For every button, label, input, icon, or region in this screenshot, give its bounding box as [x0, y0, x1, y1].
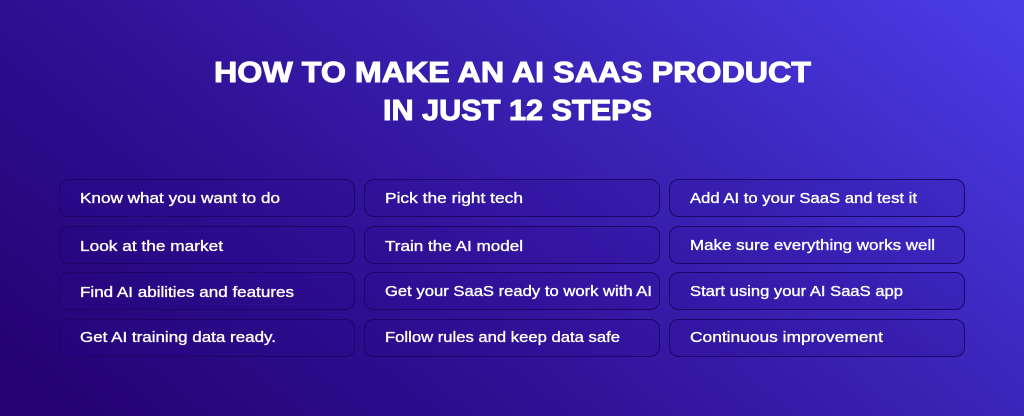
step: Know what you want to do: Know what you want to do	[80, 190, 280, 207]
title: HOW TO MAKE AN AI SAAS PRODUCT	[214, 57, 811, 89]
step: Add AI to your SaaS and test it: Add AI to your SaaS and test it	[690, 190, 918, 207]
step: Train the AI model: Train the AI model	[385, 238, 523, 255]
step: Look at the market: Look at the market	[80, 238, 224, 255]
step: Follow rules and keep data safe	[364, 320, 660, 356]
step: Get your SaaS ready to work with AI: Get your SaaS ready to work with AI	[385, 283, 652, 300]
step: Continuous improvement	[670, 320, 964, 356]
step: Get AI training data ready.	[60, 320, 354, 356]
step: Start using your AI SaaS app	[670, 272, 964, 310]
step: Find AI abilities and features: Find AI abilities and features	[80, 284, 294, 301]
step: Get your SaaS ready to work with AI	[364, 272, 660, 310]
step: Pick the right tech: Pick the right tech	[385, 190, 523, 207]
step: Get AI training data ready.: Get AI training data ready.	[80, 329, 276, 346]
step: Pick the right tech	[364, 180, 660, 216]
step: Find AI abilities and features	[60, 272, 354, 310]
title	[214, 57, 811, 127]
step: Add AI to your SaaS and test it	[670, 180, 964, 216]
step: Start using your AI SaaS app: Start using your AI SaaS app	[690, 283, 903, 300]
step: Train the AI model	[364, 226, 660, 264]
step: Know what you want to do	[60, 180, 354, 216]
step: Make sure everything works well	[670, 226, 964, 264]
step: Look at the market	[60, 226, 354, 264]
step: Continuous improvement: Continuous improvement	[690, 329, 884, 346]
title: IN JUST 12 STEPS	[383, 95, 652, 127]
step: Make sure everything works well: Make sure everything works well	[690, 237, 935, 254]
step: Follow rules and keep data safe: Follow rules and keep data safe	[385, 329, 620, 346]
